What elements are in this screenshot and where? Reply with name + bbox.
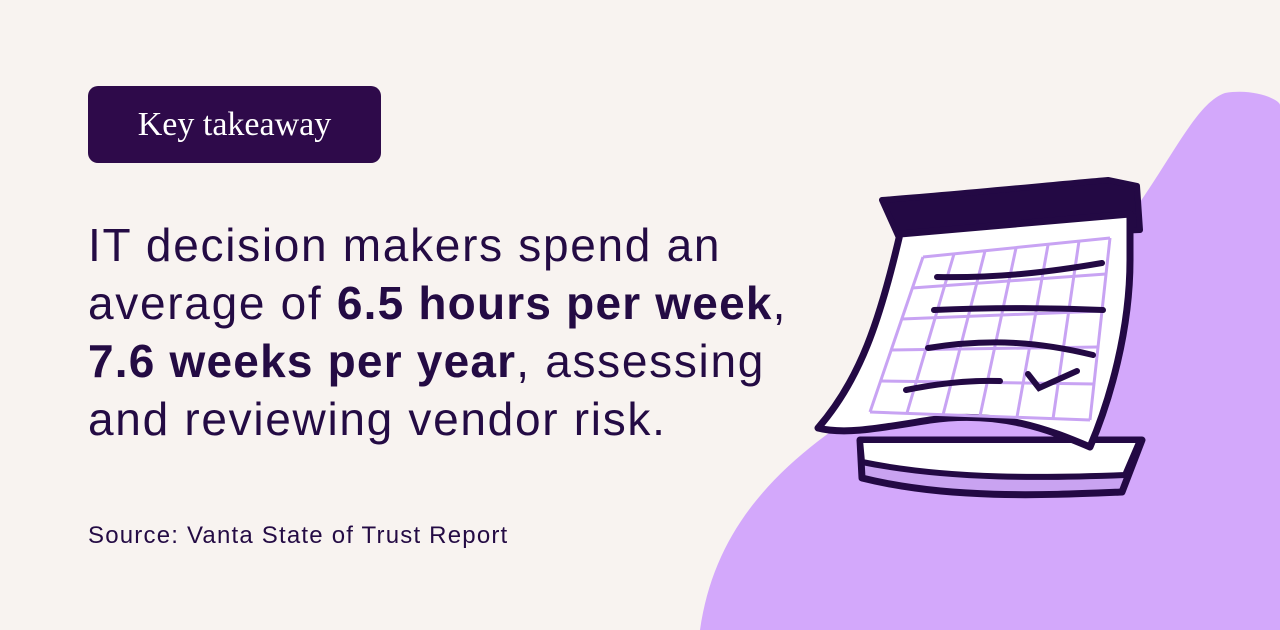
grid [870, 238, 1110, 420]
under pages [860, 440, 1142, 495]
page [818, 214, 1130, 447]
main text: and reviewing vendor risk. [88, 393, 667, 445]
main text [88, 219, 787, 445]
purple blob [700, 92, 1280, 630]
main text: 7.6 weeks per year, assessing [88, 335, 765, 387]
entries [906, 263, 1103, 390]
header [882, 180, 1140, 240]
main text: average of 6.5 hours per week, [88, 277, 787, 329]
source: Source: Vanta State of Trust Report [88, 522, 508, 549]
main text: IT decision makers spend an [88, 219, 721, 271]
badge: key takeaway [88, 86, 381, 163]
badge: key takeaway: Key takeaway [138, 106, 331, 143]
icon: calendar [818, 180, 1142, 495]
